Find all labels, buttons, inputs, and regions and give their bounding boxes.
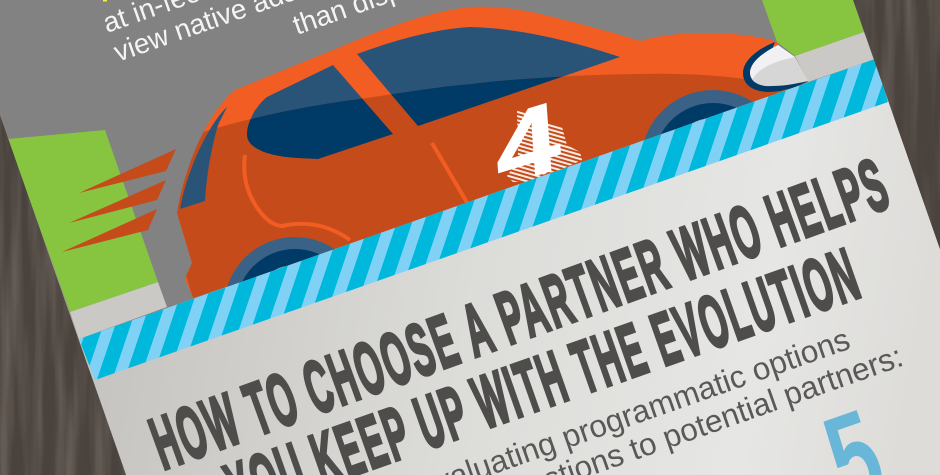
right pavement <box>795 32 875 82</box>
wheel arch line <box>244 155 350 240</box>
door line <box>432 143 469 206</box>
panel: grey road scene <box>0 0 875 339</box>
left green verge <box>8 130 158 312</box>
number 4 hatched shadow <box>507 109 582 182</box>
heading: how to choose a partner <box>140 142 900 475</box>
rear wheel <box>227 237 334 287</box>
orange car <box>177 6 808 298</box>
front wheel <box>644 90 753 140</box>
right green verge <box>762 0 864 56</box>
car windows <box>209 27 620 130</box>
number 4: 4 <box>492 80 563 208</box>
speed lines <box>62 149 176 252</box>
text block: native ads statistic <box>103 0 396 60</box>
headlight <box>743 42 808 92</box>
car body <box>177 7 808 298</box>
striped band <box>79 59 888 380</box>
left pavement <box>70 282 167 339</box>
lower body shade <box>177 74 784 298</box>
